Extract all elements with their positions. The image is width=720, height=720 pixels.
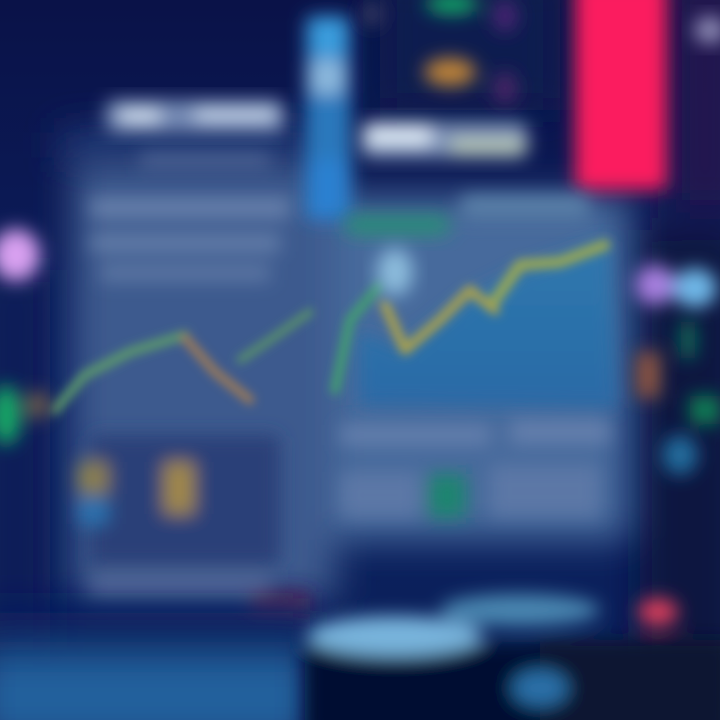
chart highlight marker [377, 248, 413, 296]
text lines left panel [90, 152, 290, 281]
icon: coffee cup [305, 594, 720, 720]
lower right panel table [340, 420, 610, 518]
top right pale smudge [694, 16, 720, 44]
blue chart area [358, 240, 618, 408]
light blue vertical column [305, 15, 351, 220]
right side vertical tickers [636, 322, 720, 475]
top tickers: green and orange [362, 0, 517, 104]
left pink glow [0, 229, 40, 281]
line chart [55, 245, 605, 410]
bottom floor [0, 610, 310, 720]
pink vertical bar [575, 0, 667, 190]
right pink and blue glow [635, 265, 717, 308]
left edge green and orange marker [0, 385, 49, 445]
lower left panel blocks [78, 435, 310, 612]
main dashboard panel [72, 160, 630, 600]
green header band above chart [345, 195, 590, 235]
heading: blurred title right [360, 122, 528, 158]
heading: blurred title left [105, 100, 285, 132]
